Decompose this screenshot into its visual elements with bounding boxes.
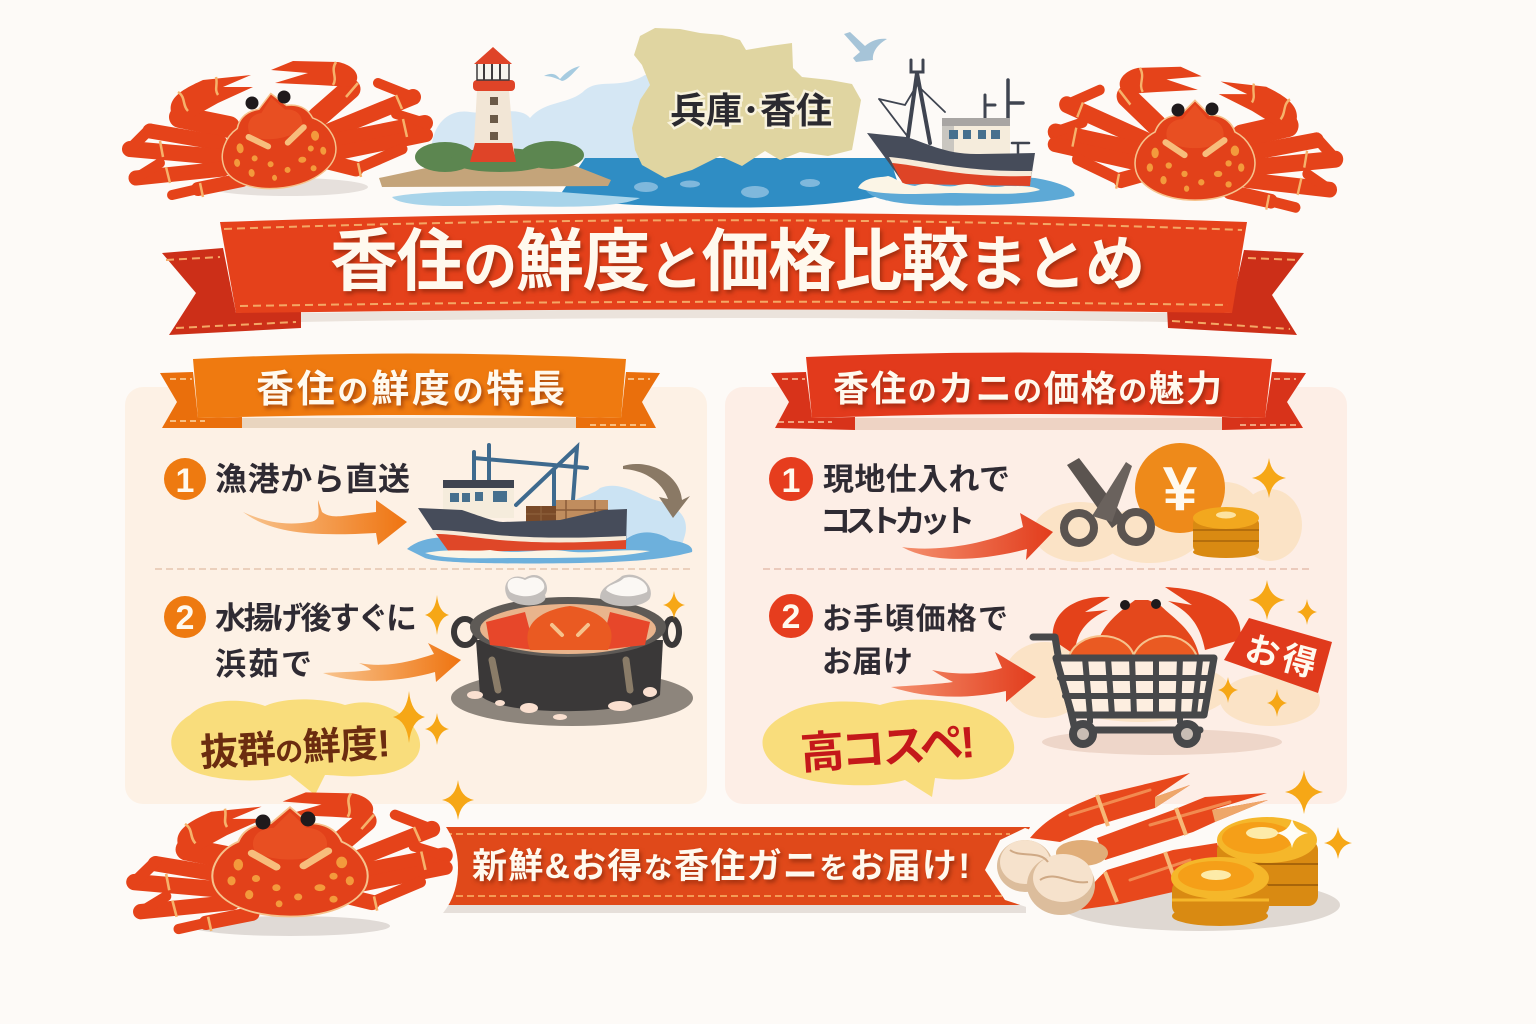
main title ribbon	[162, 213, 1304, 335]
banner shadow	[436, 905, 1026, 913]
bottom banner	[436, 827, 1030, 913]
tag: good deal: お得	[1241, 629, 1320, 685]
yen coin: ¥	[1163, 455, 1198, 524]
item 2 text: 浜茹で	[215, 647, 312, 682]
foam clouds on sea	[634, 179, 820, 198]
crab bottom left	[135, 792, 458, 936]
ground shadow	[1060, 879, 1340, 931]
coin stack back	[1217, 817, 1318, 906]
ribbon tail left	[162, 248, 301, 335]
cart frame	[1033, 637, 1214, 730]
top scene: Kasumi coast	[379, 28, 1075, 207]
item 2 number	[164, 596, 206, 638]
title text: 香住の鮮度と価格比較まとめ	[330, 224, 1145, 300]
ribbon shadow	[300, 310, 1168, 322]
boat with crates	[407, 445, 692, 563]
sparkle above banner	[442, 780, 474, 820]
item 2 text	[215, 601, 417, 682]
boat water	[866, 177, 1075, 206]
arrow 2	[323, 643, 461, 682]
spray	[560, 486, 686, 552]
foam	[858, 176, 1040, 194]
item 1 text: 現地仕入れで	[823, 462, 1010, 497]
panel: freshness	[125, 354, 707, 804]
divider	[763, 568, 1313, 570]
item 2 number	[769, 594, 813, 638]
sky cloud wash	[431, 75, 668, 160]
pale shore water	[392, 191, 640, 207]
ribbon tail right	[1167, 250, 1304, 335]
sticker outline	[362, 806, 458, 930]
crab in cart	[1053, 587, 1241, 660]
coin stack front	[1171, 857, 1269, 926]
yen coin	[1135, 443, 1225, 533]
item 1 number	[164, 458, 206, 500]
coin stack small	[1193, 507, 1259, 558]
fishing boat	[858, 60, 1075, 206]
item 2 text: お届け	[822, 646, 913, 679]
ribbon body	[220, 213, 1247, 313]
peach blobs	[1003, 642, 1320, 726]
item 2 number: 2	[782, 598, 800, 636]
scissors and coins	[1033, 443, 1302, 563]
curved arrow	[623, 464, 690, 518]
item 1 text	[820, 462, 1010, 539]
shopping cart with crab	[1003, 580, 1332, 755]
section ribbon: freshness	[160, 354, 660, 428]
callout: outstanding freshness: 抜群の鮮度!	[199, 723, 391, 775]
sparkles	[1218, 580, 1317, 717]
panel background	[725, 387, 1347, 804]
item 1 text: 漁港から直送	[215, 461, 410, 497]
peach blobs	[1033, 482, 1302, 563]
panel background	[125, 387, 707, 804]
item 1 number: 1	[176, 462, 194, 500]
steam	[505, 575, 651, 606]
callout: high value	[762, 700, 1014, 797]
lighthouse	[470, 47, 516, 162]
sparkles	[1285, 770, 1323, 814]
section heading: 香住のカニの価格の魅力	[833, 368, 1222, 409]
item 1 number	[769, 457, 813, 501]
section heading: 香住の鮮度の特長	[256, 369, 565, 411]
item 2 text	[822, 603, 1008, 679]
water	[407, 532, 692, 563]
crab top left	[130, 61, 426, 197]
claws and gold coins	[985, 770, 1352, 931]
item 1 number: 1	[782, 462, 800, 500]
item 2 text: お手頃価格で	[822, 603, 1008, 636]
crab top right	[1054, 67, 1336, 210]
item 2 number: 2	[176, 599, 194, 637]
gull small	[544, 66, 580, 81]
arrow 2	[891, 652, 1036, 702]
sea	[560, 158, 900, 207]
item 2 text: 水揚げ後すぐに	[215, 601, 417, 636]
section ribbon: price	[771, 352, 1306, 430]
arrow 1	[902, 513, 1053, 560]
map of Hyogo	[632, 28, 861, 178]
tag: good deal	[1224, 618, 1332, 693]
banner body	[436, 827, 1030, 905]
banner text: 新鮮&お得な香住ガニをお届け!	[472, 847, 970, 886]
claws	[1030, 773, 1268, 910]
panel: price	[725, 352, 1347, 804]
item 1 text: コストカット	[820, 504, 975, 539]
arrow 1	[243, 500, 407, 545]
sparkles	[425, 591, 685, 635]
scissors	[1064, 458, 1151, 543]
callout: outstanding freshness	[171, 691, 449, 795]
island	[379, 141, 611, 187]
gull large	[844, 32, 887, 62]
claw meat	[1056, 840, 1108, 866]
sticker outline	[985, 828, 1100, 918]
pot over fire	[451, 575, 693, 726]
callout: high value: 高コスペ!	[799, 718, 977, 779]
map label: 兵庫･香住	[670, 90, 832, 131]
divider	[155, 568, 690, 570]
